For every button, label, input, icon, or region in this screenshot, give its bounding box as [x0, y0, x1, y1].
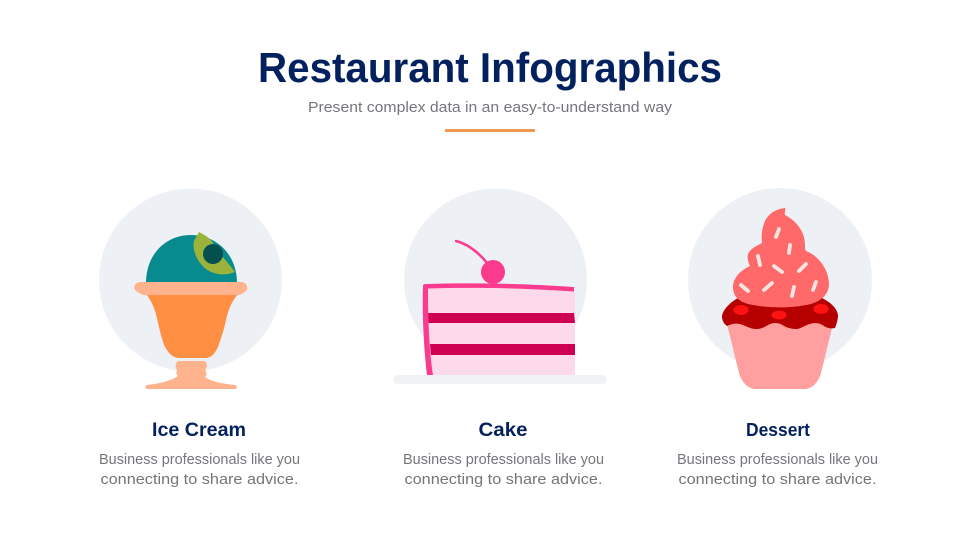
panel: cake	[393, 188, 607, 488]
text: cake description: Business professionals like you	[403, 451, 604, 468]
text: ice cream description: connecting to share advice.	[100, 471, 298, 488]
icon: cake	[393, 188, 607, 384]
icon: cupcake	[688, 188, 872, 389]
text: cake description: connecting to share advice.	[404, 471, 602, 488]
text: ice cream description: Business professionals like you	[99, 451, 300, 468]
heading: dessert: Dessert	[746, 419, 810, 440]
icon: ice cream	[99, 188, 282, 389]
heading: ice cream: Ice Cream	[152, 420, 246, 441]
heading: cake: Cake	[478, 420, 528, 441]
panel: ice cream	[99, 188, 300, 488]
text: dessert description: connecting to share advice.	[678, 471, 876, 488]
text: dessert description: Business professionals like you	[677, 451, 878, 468]
subtitle: Present complex data in an easy-to-understand way	[308, 99, 673, 116]
accent underline	[445, 129, 535, 132]
panel: dessert	[677, 188, 878, 488]
title: Restaurant Infographics	[258, 44, 722, 91]
